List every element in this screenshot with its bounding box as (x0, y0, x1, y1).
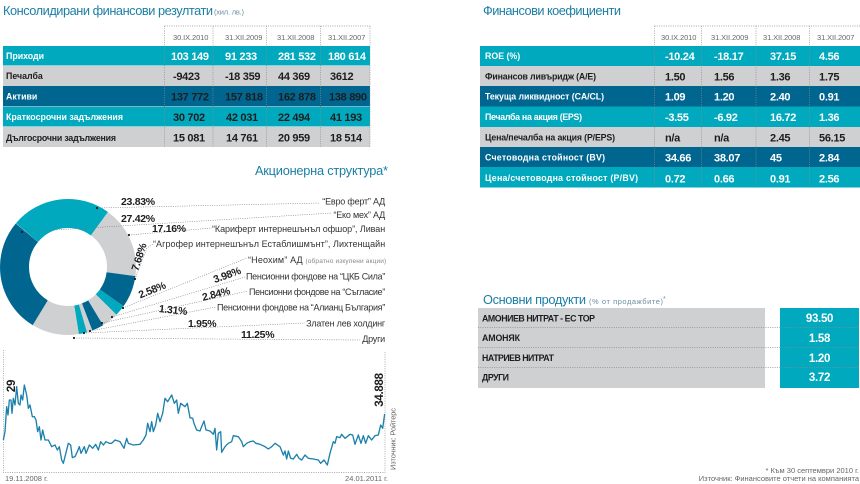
row: short-term liabilities (6, 112, 362, 124)
donut percentage labels: 27.42% (121, 213, 156, 225)
row: profit: -9423 (173, 71, 200, 83)
row: profit: -18 359 (225, 71, 260, 83)
row: short-term liabilities: 41 193 (330, 112, 362, 124)
heading: main products: Основни продукти (483, 292, 586, 307)
row: assets (6, 92, 367, 104)
shareholder names (153, 196, 386, 344)
row: book value: 45 (770, 152, 782, 164)
heading: main products (483, 292, 666, 307)
shareholder names: Пенсионни фондове на “Алианц България” (217, 302, 385, 312)
product: ammonia: АМОНЯК (482, 333, 521, 343)
product: ammonium nitrate (482, 313, 833, 325)
row: book value: 2.84 (819, 152, 840, 164)
panel: main products table (478, 308, 859, 388)
donut percentage labels: 1.31% (158, 303, 189, 318)
row: P/EPS: n/a (714, 132, 730, 144)
row: ROE (485, 51, 839, 63)
donut percentage labels (121, 196, 275, 341)
column headers: 30.IX.2010 (173, 33, 208, 42)
row: profit: 3612 (330, 71, 353, 83)
row: current liquidity: Текуща ликвидност (CA/CL) (485, 92, 604, 102)
heading: main products: * (663, 296, 666, 303)
row: EPS: 1.36 (819, 112, 839, 124)
row: long-term liabilities: 20 959 (278, 132, 310, 144)
donut percentage labels: 17.16% (152, 223, 187, 235)
row: leverage: 1.36 (770, 72, 790, 84)
product: other: ДРУГИ (482, 372, 509, 382)
shareholder names: “Евро ферт” АД (322, 196, 385, 206)
row: short-term liabilities: 22 494 (278, 112, 311, 124)
row: ROE: 4.56 (819, 51, 839, 63)
shareholder names: Златен лев холдинг (306, 318, 386, 328)
column headers: 31.XII.2009 (225, 33, 262, 42)
row: EPS: -3.55 (665, 112, 689, 124)
row: short-term liabilities: 42 031 (226, 112, 258, 124)
row: ROE: 37.15 (770, 51, 796, 63)
footnotes (699, 466, 860, 483)
ratio column headers: 30.IX.2010 (661, 33, 696, 42)
row: leverage: 1.75 (819, 72, 839, 84)
footnotes: * Към 30 септември 2010 г. (766, 466, 859, 475)
row: P/EPS: Цена/печалба на акция (P/EPS) (485, 132, 615, 142)
heading: consolidated financial results: Консолидирани финансови резултати (3, 3, 213, 18)
product: ammonia: 1.58 (809, 333, 831, 345)
row: book value (485, 152, 840, 164)
donut percentage labels: 23.83% (121, 196, 156, 208)
row: current liquidity: 1.20 (714, 92, 734, 104)
row: short-term liabilities: 30 702 (173, 112, 205, 124)
leader lines from donut to shareholder names (21, 203, 360, 340)
product: other: 3.72 (809, 372, 830, 384)
row: P/BV (485, 173, 839, 186)
row: P/EPS: 56.15 (819, 132, 845, 144)
donut percentage labels: 1.95% (188, 318, 217, 330)
product: sodium nitrate: НАТРИЕВ НИТРАТ (482, 353, 555, 363)
donut percentage labels: 7.68% (129, 241, 150, 272)
start value: 29 (6, 380, 18, 392)
source note: Източник: Ройтерс (388, 408, 398, 470)
row: ROE: -18.17 (714, 51, 744, 63)
shareholder names: Пенсионни фондове на “Съгласие” (249, 287, 385, 297)
row: revenue: 91 233 (225, 51, 257, 63)
donut percentage labels: 3.98% (212, 265, 243, 286)
end value: 34.888 (374, 372, 386, 407)
row: leverage: 1.56 (714, 72, 734, 84)
row: profit: 44 369 (278, 71, 310, 83)
row: current liquidity: 2.40 (770, 92, 790, 104)
row: EPS: 16.72 (770, 112, 796, 124)
product backgrounds (478, 308, 859, 388)
column headers: 31.XII.2008 (277, 33, 314, 42)
row: P/BV: 0.72 (665, 174, 685, 186)
line chart: share price (3, 350, 397, 483)
row: EPS (485, 112, 839, 124)
shareholder names: Пенсионни фондове на “ЦКБ Сила” (246, 272, 385, 282)
product: sodium nitrate (482, 353, 830, 365)
column headers (173, 33, 365, 42)
ratio column headers: 31.XII.2009 (711, 33, 748, 42)
end date: 24.01.2011 г. (345, 474, 388, 483)
row: P/EPS: 2.45 (770, 132, 790, 144)
column headers: 31.XII.2007 (328, 33, 365, 42)
shareholder names: “Кариферт интернешънъл офшор”, Ливан (212, 224, 385, 234)
row: long-term liabilities (6, 132, 363, 144)
heading: main products: (% от продажбите) (589, 297, 664, 306)
row: EPS: -6.92 (714, 112, 738, 124)
ratio row backgrounds (480, 26, 860, 188)
row: long-term liabilities: 18 514 (330, 132, 363, 144)
row: P/EPS: n/a (665, 132, 681, 144)
row: assets: 162 878 (278, 92, 316, 104)
ratio column headers (661, 33, 854, 42)
row: revenue: 180 614 (328, 51, 367, 63)
row: ROE: ROE (%) (485, 51, 520, 61)
row: assets: 137 772 (171, 92, 209, 104)
row: book value: Счетоводна стойност (BV) (485, 152, 605, 162)
row: book value: 34.66 (665, 152, 691, 164)
chart axes (4, 350, 385, 472)
row: profit (6, 71, 353, 83)
row backgrounds (3, 26, 370, 147)
shareholder names: “Еко мех” АД (333, 210, 385, 220)
row: current liquidity: 1.09 (665, 92, 685, 104)
product: ammonium nitrate: АМОНИЕВ НИТРАТ - ЕС ТОР (482, 314, 595, 324)
start date: 19.11.2008 г. (5, 474, 48, 483)
panel: consolidated results table (3, 26, 370, 147)
row: assets: Активи (6, 92, 37, 102)
row: book value: 38.07 (714, 152, 740, 164)
row: EPS: Печалба на акция (EPS) (485, 112, 582, 122)
donut chart: shareholder structure (0, 192, 143, 342)
shareholder names: “Агрофер интернешънъл Естаблишмънт”, Лихтенщайн (153, 239, 385, 249)
row: assets: 157 818 (225, 92, 263, 104)
row: leverage (485, 72, 839, 84)
row: revenue (6, 51, 367, 63)
row: revenue: 281 532 (278, 51, 316, 63)
row: P/BV: Цена/счетоводна стойност (P/BV) (485, 173, 638, 183)
shareholder names: Други (362, 334, 385, 344)
row: current liquidity: 0.91 (819, 92, 839, 104)
product: ammonium nitrate: 93.50 (806, 313, 833, 325)
row: P/EPS (485, 132, 845, 144)
row: P/BV: 0.91 (770, 174, 790, 186)
row: long-term liabilities: 14 761 (226, 132, 258, 144)
heading: shareholder structure: Акционерна структура* (255, 163, 388, 178)
panel: financial ratios table (480, 26, 860, 188)
row: P/BV: 0.66 (714, 174, 734, 186)
row: assets: 138 890 (329, 92, 367, 104)
product: ammonia (482, 333, 831, 345)
heading: consolidated financial results: (хил. лв.) (214, 8, 244, 16)
row: long-term liabilities: Дългосрочни задължения (6, 133, 116, 143)
donut percentage labels: 2.84% (201, 285, 232, 304)
heading: financial ratios: Финансови коефициенти (483, 3, 621, 18)
row: leverage: Финансов ливъридж (A/E) (485, 72, 596, 82)
row: P/BV: 2.56 (819, 174, 839, 186)
footnotes: Източник: Финансовите отчети на компанията (699, 474, 860, 483)
row: ROE: -10.24 (665, 51, 696, 63)
ratio column headers: 31.XII.2008 (763, 33, 800, 42)
ratio column headers: 31.XII.2007 (817, 33, 854, 42)
row: leverage: 1.50 (665, 72, 685, 84)
donut percentage labels: 2.58% (137, 279, 168, 301)
row: revenue: Приходи (6, 51, 44, 61)
shareholder names: “Неохим” АД (обратно изкупени акции) (248, 255, 386, 265)
row: current liquidity (485, 92, 839, 104)
row: profit: Печалба (6, 71, 43, 81)
row: long-term liabilities: 15 081 (173, 132, 205, 144)
product: other (482, 372, 830, 384)
row: short-term liabilities: Краткосрочни задължения (6, 112, 123, 122)
row: revenue: 103 149 (171, 51, 209, 63)
price line (3, 385, 385, 465)
product: sodium nitrate: 1.20 (809, 353, 830, 365)
donut percentage labels: 11.25% (241, 329, 275, 341)
